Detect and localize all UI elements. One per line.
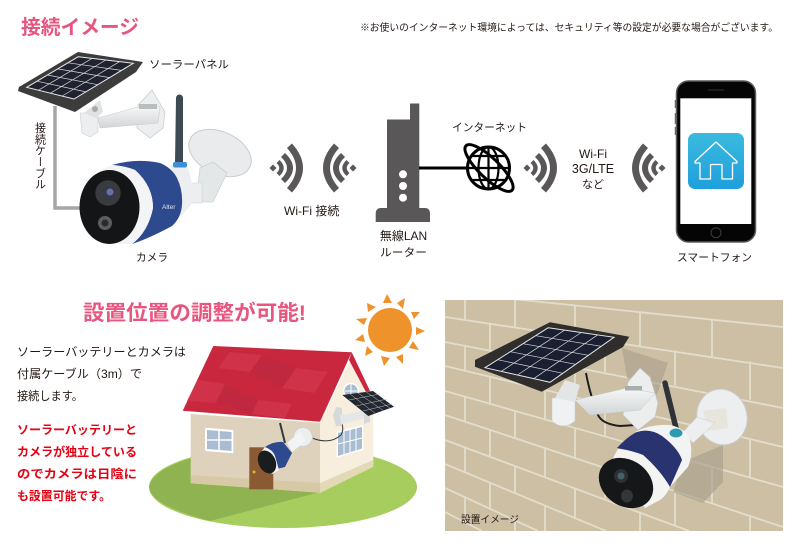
icon: sun [355,294,425,366]
text block: red callout [17,423,137,503]
label: wifi 3G LTE: Wi-Fi [579,147,607,161]
illustration: camera on house [254,423,312,476]
icon: wifi waves phone side [632,144,666,192]
heading: adjustable installation: 設置位置の調整が可能! [83,301,306,325]
icon: camera [80,95,259,244]
icon: globe [459,139,519,197]
icon: wifi waves internet side [524,144,557,192]
text block: red callout: も設置可能です。 [17,488,111,503]
icon: wifi waves camera side [270,144,303,192]
label: installation image: 設置イメージ [461,514,519,526]
text block: cable description: 接続します。 [17,388,83,403]
label: router: ルーター [380,246,427,259]
text block: cable description [17,345,186,403]
note: settings disclaimer: ※お使いのインターネット環境によっては、セキュリティ等の設定が必要な場合がございます。 [360,21,778,34]
icon: solar panel [18,52,143,112]
text block: cable description: ソーラーバッテリーとカメラは [17,345,186,359]
title: connection image: 接続イメージ [21,16,139,39]
icon: solar panel bracket [80,90,165,138]
icon: wireless router [376,104,430,222]
connection cable line [55,106,82,208]
photo: installation on brick wall [445,292,783,531]
icon: wifi waves router side [323,144,356,192]
label: solar panel: ソーラーパネル [149,58,229,71]
label: connection cable: 接続ケーブル [34,122,46,190]
label: wifi 3G LTE [572,147,614,191]
icon: camera: Alter [162,204,176,211]
label: wifi 3G LTE: など [582,178,604,191]
text block: cable description: 付属ケーブル（3m）で [17,366,142,381]
label: camera: カメラ [136,251,168,264]
text block: red callout: のでカメラは日陰に [17,467,137,481]
connection line router to internet [419,166,472,170]
label: smartphone: スマートフォン [677,252,752,264]
icon: smartphone with home app [676,81,756,242]
label: wireless LAN router: 無線LAN [380,228,427,243]
label: wifi 3G LTE: 3G/LTE [572,162,614,176]
text block: red callout: ソーラーバッテリーと [17,423,137,437]
illustration: house on lawn [149,346,417,528]
label: wifi connection: Wi-Fi 接続 [284,203,339,218]
text block: red callout: カメラが独立している [17,444,137,459]
label: internet: インターネット [452,121,527,134]
